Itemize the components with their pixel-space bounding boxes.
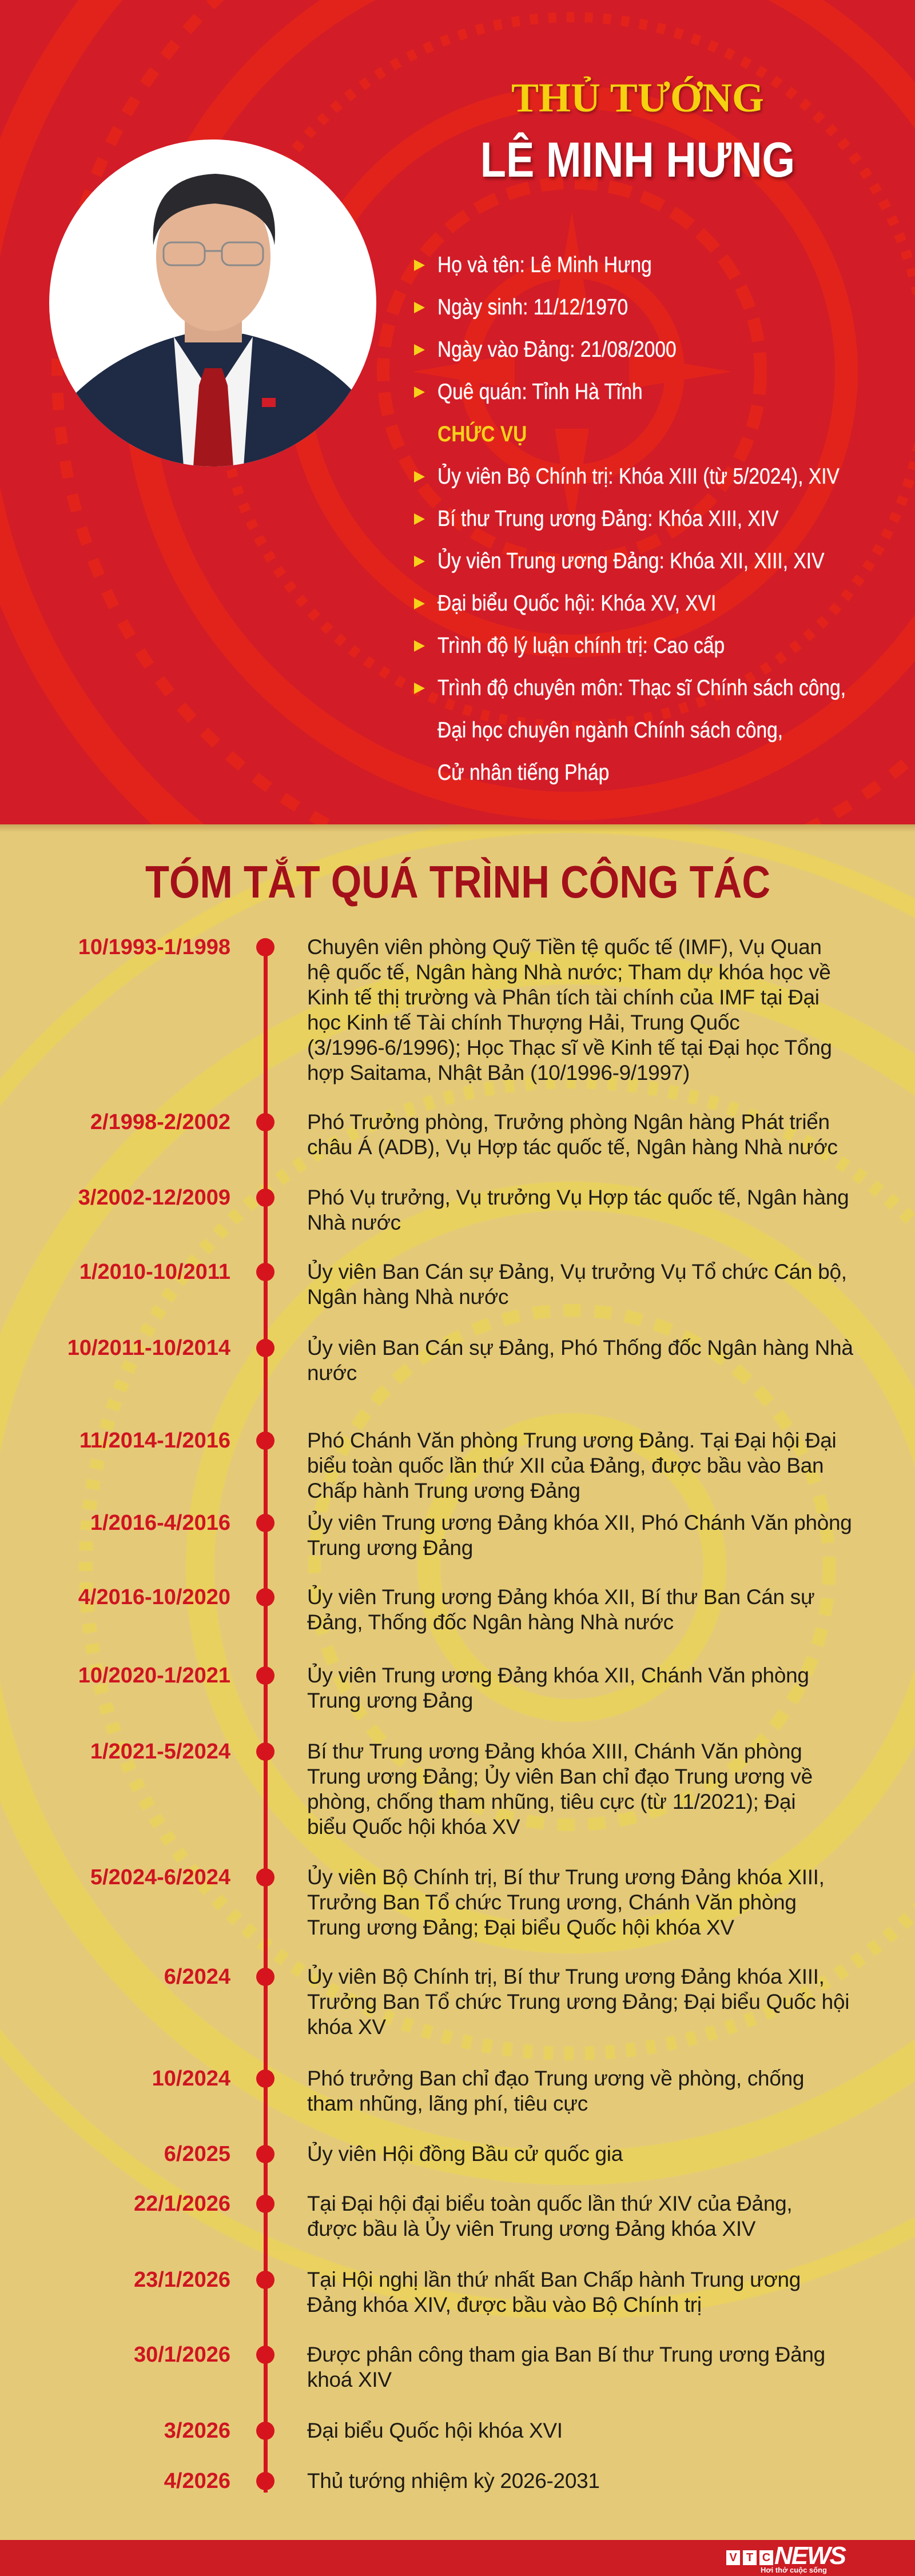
- info list: [414, 253, 846, 785]
- photo: portrait circle: [49, 139, 376, 466]
- timeline entries: Phó Trưởng phòng, Trưởng phòng Ngân hàng Phát triển: [307, 1110, 830, 1134]
- info list: Cử nhân tiếng Pháp: [437, 760, 609, 785]
- entry 5/2024-6/2024: [90, 1865, 825, 1939]
- timeline entries: phòng, chống tham nhũng, tiêu cực (từ 11/2021); Đại: [307, 1790, 795, 1813]
- timeline entries: Ngân hàng Nhà nước: [307, 1285, 508, 1309]
- logo: VTC NEWS: C: [762, 2551, 770, 2564]
- info list: Ủy viên Bộ Chính trị: Khóa XIII (từ 5/2024), XIV: [437, 464, 840, 489]
- entry 3/2026: [164, 2419, 563, 2443]
- timeline panel background pattern: [0, 824, 915, 2319]
- timeline entries: 1/2010-10/2011: [79, 1260, 230, 1284]
- info list: Đại học chuyên ngành Chính sách công,: [437, 718, 783, 743]
- heading: TÓM TẮT QUÁ TRÌNH CÔNG TÁC: TÓM TẮT QUÁ TRÌNH CÔNG TÁC: [145, 856, 770, 907]
- info: national assembly: [414, 591, 716, 616]
- entry 22/1/2026: [134, 2192, 792, 2240]
- timeline entries: 1/2021-5/2024: [90, 1740, 230, 1764]
- title: LÊ MINH HƯNG: LÊ MINH HƯNG: [480, 133, 795, 188]
- entry 6/2025: [164, 2142, 623, 2166]
- glasses: [164, 242, 263, 265]
- timeline entries: Phó trưởng Ban chỉ đạo Trung ương về phòng, chống: [307, 2067, 804, 2090]
- timeline entries: 4/2016-10/2020: [78, 1585, 230, 1609]
- timeline entries: Ủy viên Trung ương Đảng khóa XII, Phó Chánh Văn phòng: [307, 1511, 852, 1534]
- timeline entries: 10/1993-1/1998: [78, 935, 230, 959]
- timeline entries: nước: [307, 1361, 357, 1385]
- timeline entries: 30/1/2026: [134, 2343, 230, 2367]
- info: secretariat: [414, 507, 779, 531]
- timeline entries: Kinh tế thị trường và Phân tích tài chính của IMF tại Đại: [307, 986, 819, 1009]
- timeline entries: biểu Quốc hội khóa XV: [307, 1815, 520, 1839]
- timeline entries: 6/2025: [164, 2142, 230, 2166]
- timeline entries: biểu toàn quốc lần thứ XII của Đảng, được bầu vào Ban: [307, 1454, 824, 1477]
- entry 10/2011-10/2014: [67, 1335, 853, 1385]
- timeline entries: Bí thư Trung ương Đảng khóa XIII, Chánh Văn phòng: [307, 1740, 802, 1763]
- timeline entries: Ủy viên Ban Cán sự Đảng, Phó Thống đốc Ngân hàng Nhà: [307, 1336, 853, 1359]
- timeline entries: khóa XV: [307, 2015, 386, 2039]
- timeline entries: Phó Vụ trưởng, Vụ trưởng Vụ Hợp tác quốc tế, Ngân hàng: [307, 1186, 849, 1209]
- timeline entries: Trung ương Đảng: [307, 1689, 473, 1712]
- info list: Trình độ chuyên môn: Thạc sĩ Chính sách công,: [437, 676, 846, 700]
- entry 4/2026: [164, 2469, 600, 2493]
- timeline entries: Nhà nước: [307, 1211, 401, 1234]
- timeline entries: 3/2002-12/2009: [78, 1186, 230, 1210]
- timeline entries: tham nhũng, lãng phí, tiêu cực: [307, 2092, 588, 2115]
- neck: [185, 300, 242, 342]
- timeline entries: Trưởng Ban Tổ chức Trung ương, Chánh Văn phòng: [307, 1891, 797, 1914]
- timeline entries: Đại biểu Quốc hội khóa XVI: [307, 2419, 563, 2442]
- timeline entries: Trung ương Đảng; Đại biểu Quốc hội khóa XV: [307, 1916, 734, 1939]
- suit: [61, 334, 369, 466]
- entry 6/2024: [164, 1964, 849, 2039]
- info list: CHỨC VỤ: [437, 422, 527, 446]
- timeline entries: Đảng, Thống đốc Ngân hàng Nhà nước: [307, 1610, 674, 1634]
- timeline entries: Ủy viên Ban Cán sự Đảng, Vụ trưởng Vụ Tổ chức Cán bộ,: [307, 1260, 847, 1283]
- timeline entries: Ủy viên Bộ Chính trị, Bí thư Trung ương Đảng khóa XIII,: [307, 1965, 825, 1988]
- timeline entries: Ủy viên Bộ Chính trị, Bí thư Trung ương Đảng khóa XIII,: [307, 1865, 825, 1889]
- entry 10/2020-1/2021: [78, 1664, 809, 1712]
- face: [156, 182, 270, 331]
- entry 4/2016-10/2020: [78, 1585, 814, 1634]
- timeline entries: hợp Saitama, Nhật Bản (10/1996-9/1997): [307, 1061, 690, 1084]
- timeline entries: 10/2011-10/2014: [67, 1336, 230, 1360]
- entry 11/2014-1/2016: [79, 1429, 836, 1502]
- timeline entries: Ủy viên Hội đồng Bầu cử quốc gia: [307, 2142, 623, 2166]
- timeline entries: 5/2024-6/2024: [90, 1865, 230, 1889]
- info: birth: [414, 295, 628, 320]
- info: hometown: [414, 380, 643, 404]
- info: central committee: [414, 548, 825, 573]
- timeline entries: [67, 935, 853, 2493]
- logo: VTC NEWS: V: [729, 2551, 737, 2564]
- entry 1/2010-10/2011: [79, 1260, 847, 1309]
- entry 1/2021-5/2024: [90, 1740, 813, 1839]
- timeline entries: 11/2014-1/2016: [79, 1429, 230, 1453]
- hair: [153, 174, 275, 245]
- info list: Ngày sinh: 11/12/1970: [437, 295, 628, 320]
- timeline entries: 22/1/2026: [134, 2192, 230, 2216]
- logo: VTC NEWS: NEWS: [774, 2542, 845, 2570]
- timeline entries: 2/1998-2/2002: [90, 1110, 230, 1134]
- timeline entries: 3/2026: [164, 2419, 230, 2443]
- timeline entries: châu Á (ADB), Vụ Hợp tác quốc tế, Ngân hàng Nhà nước: [307, 1135, 838, 1159]
- info: party date: [414, 337, 677, 362]
- logo: VTC NEWS: Hơi thở cuộc sống: [761, 2566, 827, 2574]
- info: name: [414, 253, 652, 277]
- timeline entries: Chấp hành Trung ương Đảng: [307, 1479, 580, 1502]
- title: THỦ TƯỚNG: THỦ TƯỚNG: [511, 75, 764, 121]
- timeline entries: Chuyên viên phòng Quỹ Tiền tệ quốc tế (IMF), Vụ Quan: [307, 935, 822, 959]
- info list: Trình độ lý luận chính trị: Cao cấp: [437, 633, 725, 658]
- info list: Ủy viên Trung ương Đảng: Khóa XII, XIII, XIV: [437, 549, 824, 573]
- timeline entries: Phó Chánh Văn phòng Trung ương Đảng. Tại Đại hội Đại: [307, 1429, 836, 1452]
- info list: Họ và tên: Lê Minh Hưng: [437, 253, 652, 277]
- timeline entries: hệ quốc tế, Ngân hàng Nhà nước; Tham dự khóa học về: [307, 960, 831, 984]
- entry 10/2024: [152, 2067, 804, 2115]
- timeline entries: Trung ương Đảng: [307, 1536, 473, 1560]
- entry 1/2016-4/2016: [90, 1510, 852, 1560]
- entry 30/1/2026: [134, 2343, 825, 2391]
- timeline entries: (3/1996-6/1996); Học Thạc sĩ về Kinh tế tại Đại học Tổng: [307, 1036, 832, 1059]
- timeline entries: 10/2024: [152, 2067, 230, 2091]
- footer bar: [0, 2540, 915, 2576]
- timeline entries: Trung ương Đảng; Ủy viên Ban chỉ đạo Trung ương về: [307, 1765, 813, 1788]
- info list: Đại biểu Quốc hội: Khóa XV, XVI: [437, 591, 716, 616]
- logo: VTC NEWS: T: [746, 2551, 753, 2564]
- info: politburo: [414, 463, 840, 489]
- timeline line: [264, 949, 268, 2493]
- header panel: red background: [0, 0, 915, 824]
- shirt: [174, 337, 253, 466]
- timeline entries: 4/2026: [164, 2469, 230, 2493]
- timeline entries: 10/2020-1/2021: [78, 1664, 230, 1688]
- logo: VTC NEWS: [726, 2542, 846, 2574]
- entry 10/1993-1/1998: [78, 935, 832, 1084]
- timeline entries: học Kinh tế Tài chính Thượng Hải, Trung Quốc: [307, 1011, 739, 1034]
- tie: [193, 368, 233, 466]
- timeline entries: 23/1/2026: [134, 2268, 230, 2292]
- entry 23/1/2026: [134, 2268, 801, 2316]
- timeline entries: 1/2016-4/2016: [90, 1511, 230, 1535]
- info list: Bí thư Trung ương Đảng: Khóa XIII, XIV: [437, 507, 778, 531]
- info: education: [414, 676, 846, 700]
- badge: [262, 398, 276, 407]
- timeline entries: Đảng khóa XIV, được bầu vào Bộ Chính trị: [307, 2293, 702, 2316]
- timeline entries: Ủy viên Trung ương Đảng khóa XII, Bí thư Ban Cán sự: [307, 1585, 814, 1609]
- entry 2/1998-2/2002: [90, 1110, 838, 1159]
- timeline entries: Được phân công tham gia Ban Bí thư Trung ương Đảng: [307, 2343, 825, 2366]
- timeline entries: Tại Đại hội đại biểu toàn quốc lần thứ XIV của Đảng,: [307, 2192, 792, 2215]
- entry 3/2002-12/2009: [78, 1186, 849, 1234]
- info: political theory: [414, 633, 725, 658]
- timeline entries: Tại Hội nghị lần thứ nhất Ban Chấp hành Trung ương: [307, 2268, 801, 2291]
- timeline entries: Trưởng Ban Tổ chức Trung ương Đảng; Đại biểu Quốc hội: [307, 1990, 849, 2013]
- timeline entries: khoá XIV: [307, 2368, 392, 2391]
- info list: Quê quán: Tỉnh Hà Tĩnh: [437, 380, 643, 404]
- timeline entries: được bầu là Ủy viên Trung ương Đảng khóa XIV: [307, 2217, 755, 2240]
- timeline entries: Thủ tướng nhiệm kỳ 2026-2031: [307, 2469, 600, 2493]
- timeline entries: Ủy viên Trung ương Đảng khóa XII, Chánh Văn phòng: [307, 1664, 809, 1687]
- timeline entries: 6/2024: [164, 1965, 230, 1989]
- info list: Ngày vào Đảng: 21/08/2000: [437, 337, 677, 362]
